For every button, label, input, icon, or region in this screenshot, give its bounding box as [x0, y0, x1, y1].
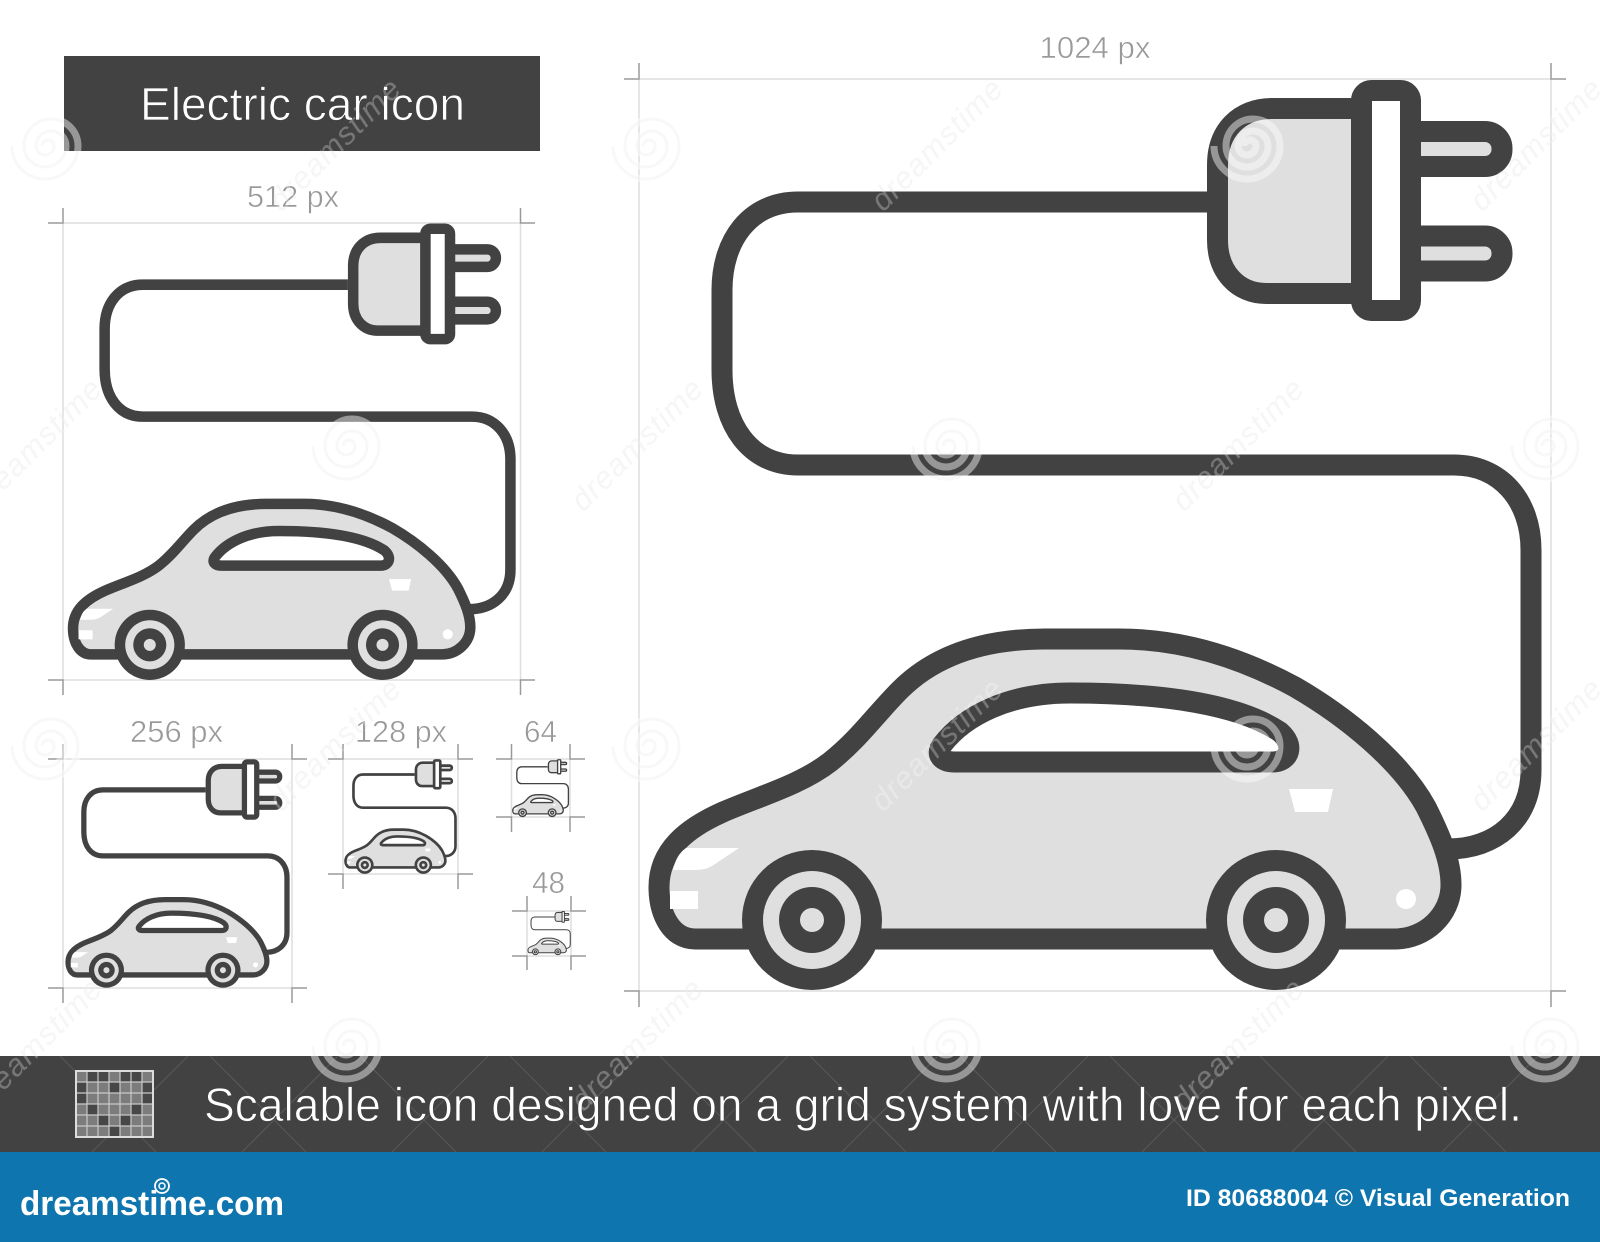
watermark: translucent overlay on dark shapes: dreamstime — [261, 71, 408, 218]
icon: electric car 256 px — [68, 762, 287, 988]
watermark: faint spirals and wordmarks on white: dreamstime — [863, 71, 1010, 218]
blue footer bar — [0, 1152, 1600, 1242]
watermark: translucent overlay on dark shapes: dreamstime — [863, 71, 1010, 218]
dark tagline bar — [0, 1056, 1600, 1152]
frame: 256 px — [48, 744, 307, 1003]
footer logo: dreamstime.com: dreamstime.com — [20, 1185, 284, 1223]
frame: 1024 px — [624, 63, 1566, 1007]
car window — [939, 693, 1289, 762]
watermark: faint spirals and wordmarks on white: dreamstime — [863, 671, 1010, 818]
watermark: faint spirals and wordmarks on white: dreamstime — [261, 671, 408, 818]
frame: 64 px — [496, 744, 585, 832]
watermark: faint spirals and wordmarks on white: dreamstime — [1164, 371, 1311, 518]
frame: 48 px — [512, 896, 586, 970]
icon: pixel grid with heart — [76, 1071, 153, 1137]
icon: electric car 128 px — [346, 760, 455, 874]
size label: 512 px: 512 px — [247, 179, 339, 214]
front wheel — [742, 850, 882, 990]
icon: electric car 48 px — [528, 912, 570, 955]
watermark: faint spirals and wordmarks on white: dreamstime — [563, 371, 710, 518]
title banner: Electric car icon — [140, 78, 465, 130]
size label: 48: 48 — [532, 865, 565, 900]
car highlights — [670, 789, 1416, 909]
rear wheel — [1206, 850, 1346, 990]
watermark: faint spirals and wordmarks on white: dreamstime — [563, 971, 710, 1118]
charging cable — [722, 202, 1531, 849]
watermark: translucent overlay on dark shapes: dreamstime — [1164, 971, 1311, 1118]
size label: 256 px: 256 px — [130, 714, 223, 749]
size label: 1024 px: 1024 px — [1040, 30, 1151, 65]
frame: 128 px — [328, 744, 473, 889]
title banner — [64, 56, 540, 151]
icon: electric car 512 px — [73, 229, 510, 680]
frame: 512 px — [48, 208, 535, 695]
car body — [659, 639, 1451, 939]
size label: 64: 64 — [524, 714, 557, 749]
icon: electric car 64 px — [513, 760, 568, 817]
watermark: translucent overlay on dark shapes: dreamstime — [863, 671, 1010, 818]
footer credit: ID 80688004 © Visual Generation — [1186, 1185, 1570, 1212]
watermark: translucent overlay on dark shapes: dreamstime — [563, 971, 710, 1118]
tagline text: Scalable icon designed on a grid system with love for each pixel. — [204, 1078, 1522, 1131]
icon: electric car 1024 px — [659, 90, 1531, 990]
watermark: translucent overlay on dark shapes: dreamstime — [563, 371, 710, 518]
watermark: translucent overlay on dark shapes: dreamstime — [1164, 371, 1311, 518]
watermark: faint spirals and wordmarks on white: dreamstime — [1164, 971, 1311, 1118]
size label: 128 px: 128 px — [355, 714, 447, 749]
plug — [1218, 90, 1502, 310]
watermark: faint spirals and wordmarks on white: dreamstime — [261, 71, 408, 218]
watermark: translucent overlay on dark shapes: dreamstime — [261, 671, 408, 818]
